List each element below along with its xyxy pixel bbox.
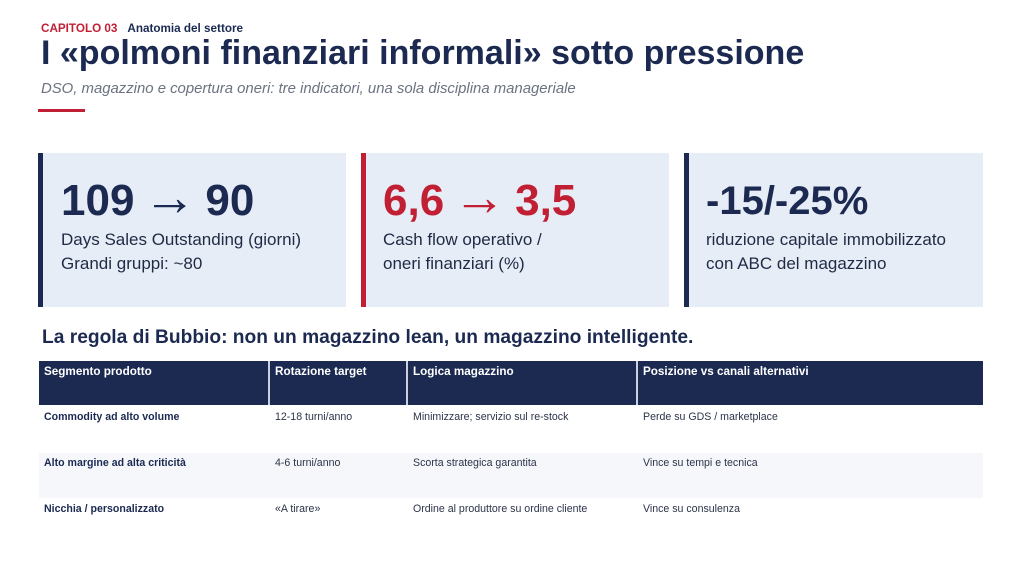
row 2 rotation: 4-6 turni/anno [275, 457, 340, 469]
header: rotation: Rotazione target [275, 365, 367, 378]
panel: DSO description: Days Sales Outstanding (giorni) [61, 230, 301, 249]
row 1 segment: Commodity ad alto volume [44, 411, 179, 423]
panel: ABC description: con ABC del magazzino [706, 254, 886, 273]
row 1 logic: Minimizzare; servizio sul re-stock [413, 411, 568, 423]
row 2 segment: Alto margine ad alta criticità [44, 457, 186, 469]
panel: cash flow description: oneri finanziari (%) [383, 254, 525, 273]
panel: ABC description [706, 230, 946, 273]
panel: DSO value: 109 → 90 [61, 169, 254, 227]
header: segment: Segmento prodotto [44, 365, 152, 378]
panel: DSO [38, 153, 346, 307]
panel: cash flow description: Cash flow operativo / [383, 230, 542, 249]
row 2 position: Vince su tempi e tecnica [643, 457, 758, 469]
panel: cash flow [361, 153, 669, 307]
title: I «polmoni finanziari informali» sotto pressione [41, 34, 804, 72]
subtitle: DSO, magazzino e copertura oneri: tre indicatori, una sola disciplina manageriale [41, 81, 576, 97]
row 1 position: Perde su GDS / marketplace [643, 411, 778, 423]
header: logic: Logica magazzino [413, 365, 514, 378]
chapter label: CAPITOLO 03 Anatomia del settore [41, 22, 243, 35]
row 2 logic: Scorta strategica garantita [413, 457, 537, 469]
alternating row [39, 453, 983, 498]
table header [39, 361, 983, 405]
row 3 rotation: «A tirare» [275, 503, 320, 515]
panel: DSO description: Grandi gruppi: ~80 [61, 254, 202, 273]
panel: ABC description: riduzione capitale immobilizzato [706, 230, 946, 249]
column divider 2 [406, 361, 408, 405]
panel: ABC value: -15/-25% [706, 179, 868, 223]
table [39, 361, 983, 498]
panel: cash flow description [383, 230, 542, 273]
row 1 rotation: 12-18 turni/anno [275, 411, 352, 423]
column divider 3 [636, 361, 638, 405]
row 3 position: Vince su consulenza [643, 503, 740, 515]
panel: DSO description [61, 230, 301, 273]
column divider 1 [268, 361, 270, 405]
panel: cash flow value: 6,6 → 3,5 [383, 169, 576, 227]
accent rule [38, 109, 85, 112]
row 3 segment: Nicchia / personalizzato [44, 503, 164, 515]
panel: ABC [684, 153, 983, 307]
section heading: La regola di Bubbio: non un magazzino lean, un magazzino intelligente. [42, 327, 693, 348]
header: position: Posizione vs canali alternativi [643, 365, 809, 378]
row 3 logic: Ordine al produttore su ordine cliente [413, 503, 587, 515]
